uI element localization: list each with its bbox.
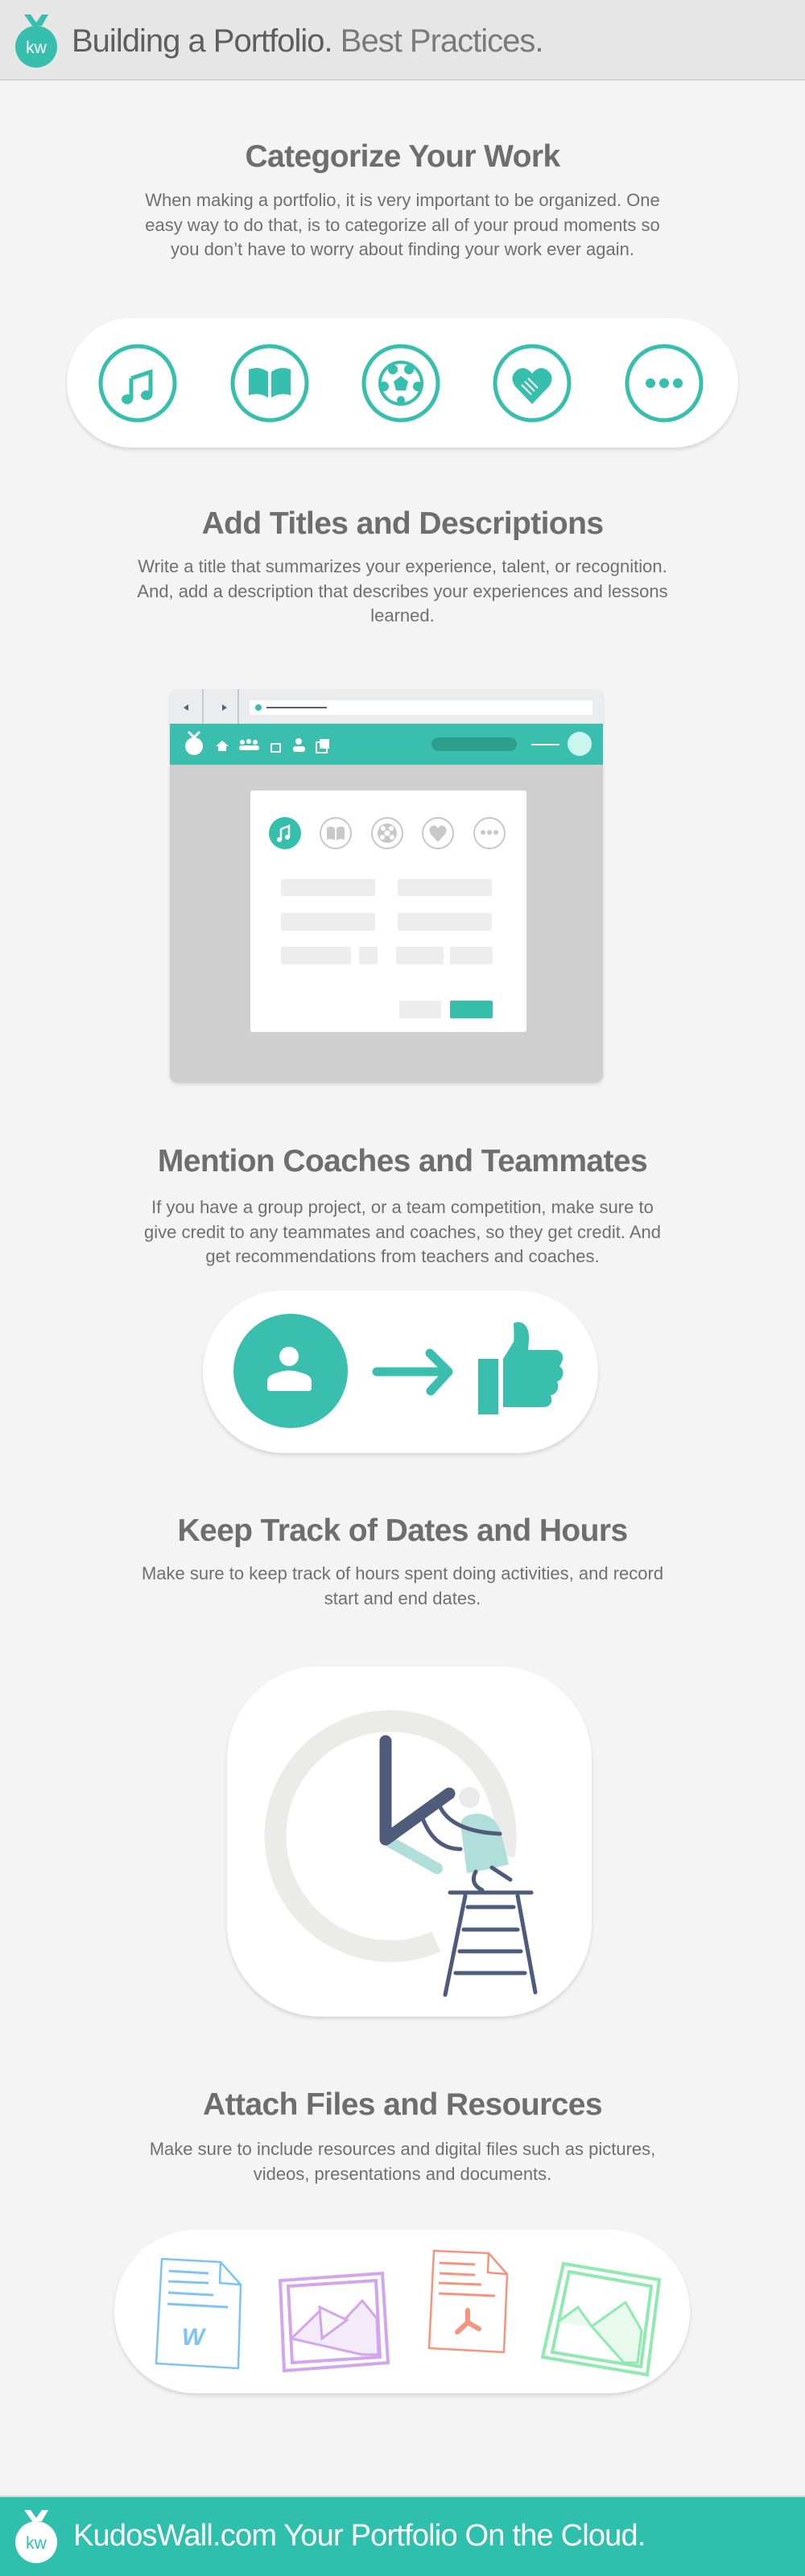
icon: pdf — [429, 2251, 507, 2352]
browser mockup — [170, 689, 603, 1083]
icon: kw logo — [15, 14, 57, 68]
text: dates — [142, 1563, 663, 1608]
icon: soccer ball — [379, 362, 423, 404]
text: titles: Write a title that summarizes your experience, talent, or recognition. — [138, 556, 667, 576]
icon: footer logo — [15, 2510, 57, 2563]
icon: word doc — [156, 2259, 241, 2368]
text: files: Make sure to include resources and digital files such as pictures, — [150, 2139, 655, 2159]
panel: file icons: W — [182, 2324, 207, 2351]
heading: Add Titles and Descriptions: Add Titles and Descriptions — [202, 506, 603, 541]
header bar — [0, 0, 805, 80]
text: categorize — [145, 190, 660, 259]
footer bar — [0, 2496, 805, 2576]
text: coaches — [144, 1197, 661, 1266]
text: coaches: give credit to any teammates and coaches, so they get credit. And — [144, 1222, 661, 1241]
panel: file icons — [114, 2230, 690, 2393]
icon: music — [122, 372, 152, 404]
text: files — [150, 2139, 655, 2183]
icon: book — [249, 368, 291, 398]
panel: category icons — [67, 318, 738, 448]
icon: person circle — [233, 1314, 348, 1428]
icon: kw logo: kw — [26, 39, 47, 57]
icon: footer logo: kw — [26, 2534, 47, 2553]
icon: thumbs up — [478, 1322, 564, 1414]
clock ring — [275, 1721, 506, 1951]
text: titles — [137, 556, 668, 625]
icon: more dots — [646, 378, 683, 388]
icon: heart handshake — [512, 368, 552, 404]
text: categorize: easy way to do that, is to categorize all of your proud moments so — [145, 214, 660, 235]
heading: Attach Files and Resources: Attach Files and Resources — [203, 2087, 602, 2122]
text: coaches: If you have a group project, or a team competition, make sure to — [151, 1197, 654, 1217]
header title: Building a Portfolio. Best Practices. — [72, 23, 543, 59]
person on ladder — [423, 1787, 535, 1995]
text: coaches: get recommendations from teachers and coaches. — [205, 1246, 600, 1266]
icon: image frame — [543, 2264, 659, 2375]
clock hands — [386, 1741, 449, 1868]
footer text: KudosWall.com Your Portfolio On the Cloud. — [73, 2519, 646, 2553]
text: titles: learned. — [370, 605, 435, 625]
panel: coaches illustration — [203, 1290, 598, 1453]
icon: video frame — [280, 2273, 388, 2371]
text: files: videos, presentations and documents. — [254, 2164, 551, 2183]
text: categorize: When making a portfolio, it is very important to be organized. One — [145, 190, 660, 210]
heading: Mention Coaches and Teammates: Mention Coaches and Teammates — [158, 1144, 647, 1179]
nav bar — [170, 724, 603, 765]
panel: clock illustration — [227, 1666, 592, 2017]
arrow — [377, 1353, 448, 1391]
text: dates: start and end dates. — [324, 1587, 481, 1608]
form card — [250, 791, 526, 1032]
text: categorize: you don’t have to worry about finding your work ever again. — [171, 239, 634, 259]
text: titles: And, add a description that describes your experiences and lessons — [137, 581, 668, 601]
heading: Categorize Your Work: Categorize Your Work — [245, 139, 560, 174]
text: dates: Make sure to keep track of hours spent doing activities, and record — [142, 1563, 663, 1583]
heading: Keep Track of Dates and Hours: Keep Track of Dates and Hours — [177, 1513, 628, 1548]
